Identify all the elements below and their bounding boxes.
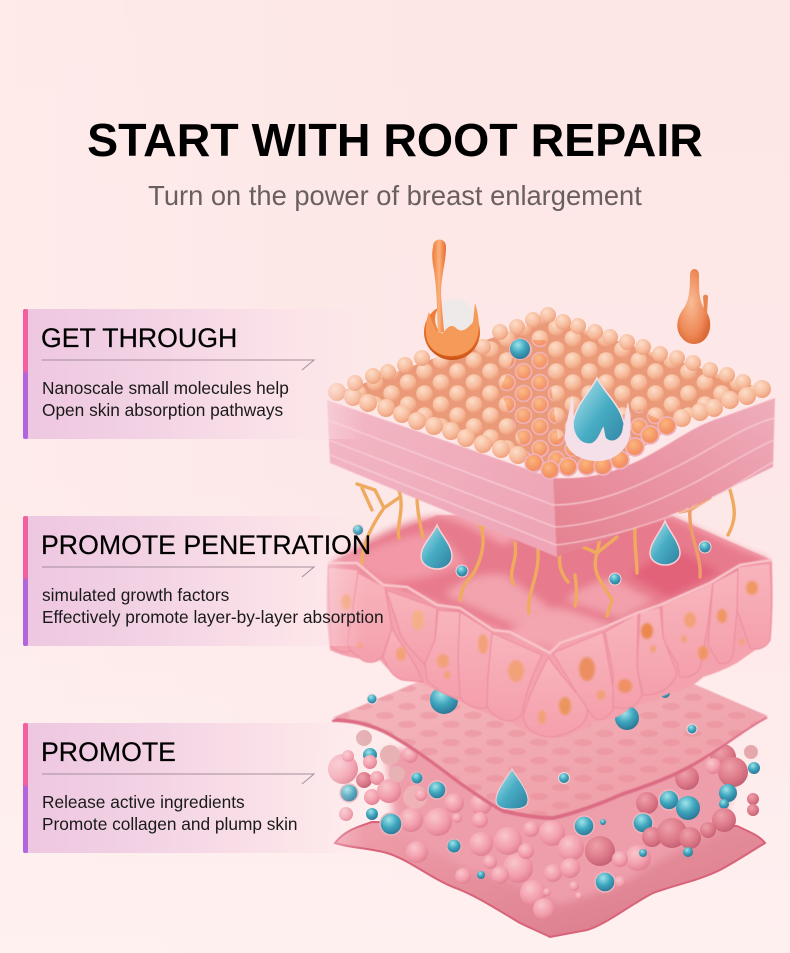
heading: promote penetration: PROMOTE PENETRATION (41, 530, 371, 560)
text: promote penetration: simulated growth factors (42, 585, 229, 605)
panel: promote penetration (23, 516, 365, 646)
cell ridge (328, 560, 772, 653)
text: promote (42, 792, 298, 834)
teal droplet with white crown (565, 378, 631, 461)
text: promote: Promote collagen and plump skin (42, 814, 298, 834)
golden nerve filaments (357, 484, 734, 616)
spheres cluster (328, 730, 760, 920)
layer top pillows (330, 517, 770, 650)
heading: promote: PROMOTE (41, 737, 176, 767)
title: START WITH ROOT REPAIR (87, 114, 703, 166)
text: promote: Release active ingredients (42, 792, 245, 812)
teal droplets on sheet (367, 686, 697, 809)
orange oil capsule (424, 240, 480, 360)
layer silhouette (327, 515, 773, 737)
text: promote penetration: Effectively promote layer-by-layer absorption (42, 607, 384, 627)
text: get through (42, 378, 289, 420)
cellular layer (327, 515, 773, 737)
text: promote penetration (42, 585, 384, 627)
bottom membrane sheet (335, 822, 765, 937)
subtitle: Turn on the power of breast enlargement (148, 180, 642, 211)
panel: promote (23, 723, 365, 853)
text: get through: Open skin absorption pathways (42, 400, 283, 420)
orange droplet (677, 269, 710, 344)
panel: get through (23, 309, 365, 439)
orange cell spots (341, 581, 758, 724)
text: get through: Nanoscale small molecules help (42, 378, 289, 398)
floating teal droplets (352, 521, 711, 585)
cell lobes (328, 563, 772, 737)
middle dimpled sheet (332, 678, 768, 820)
top skin slab (327, 398, 775, 557)
teal ball on beads (510, 338, 530, 360)
bead surface (328, 307, 771, 479)
heading: get through: GET THROUGH (41, 323, 237, 353)
